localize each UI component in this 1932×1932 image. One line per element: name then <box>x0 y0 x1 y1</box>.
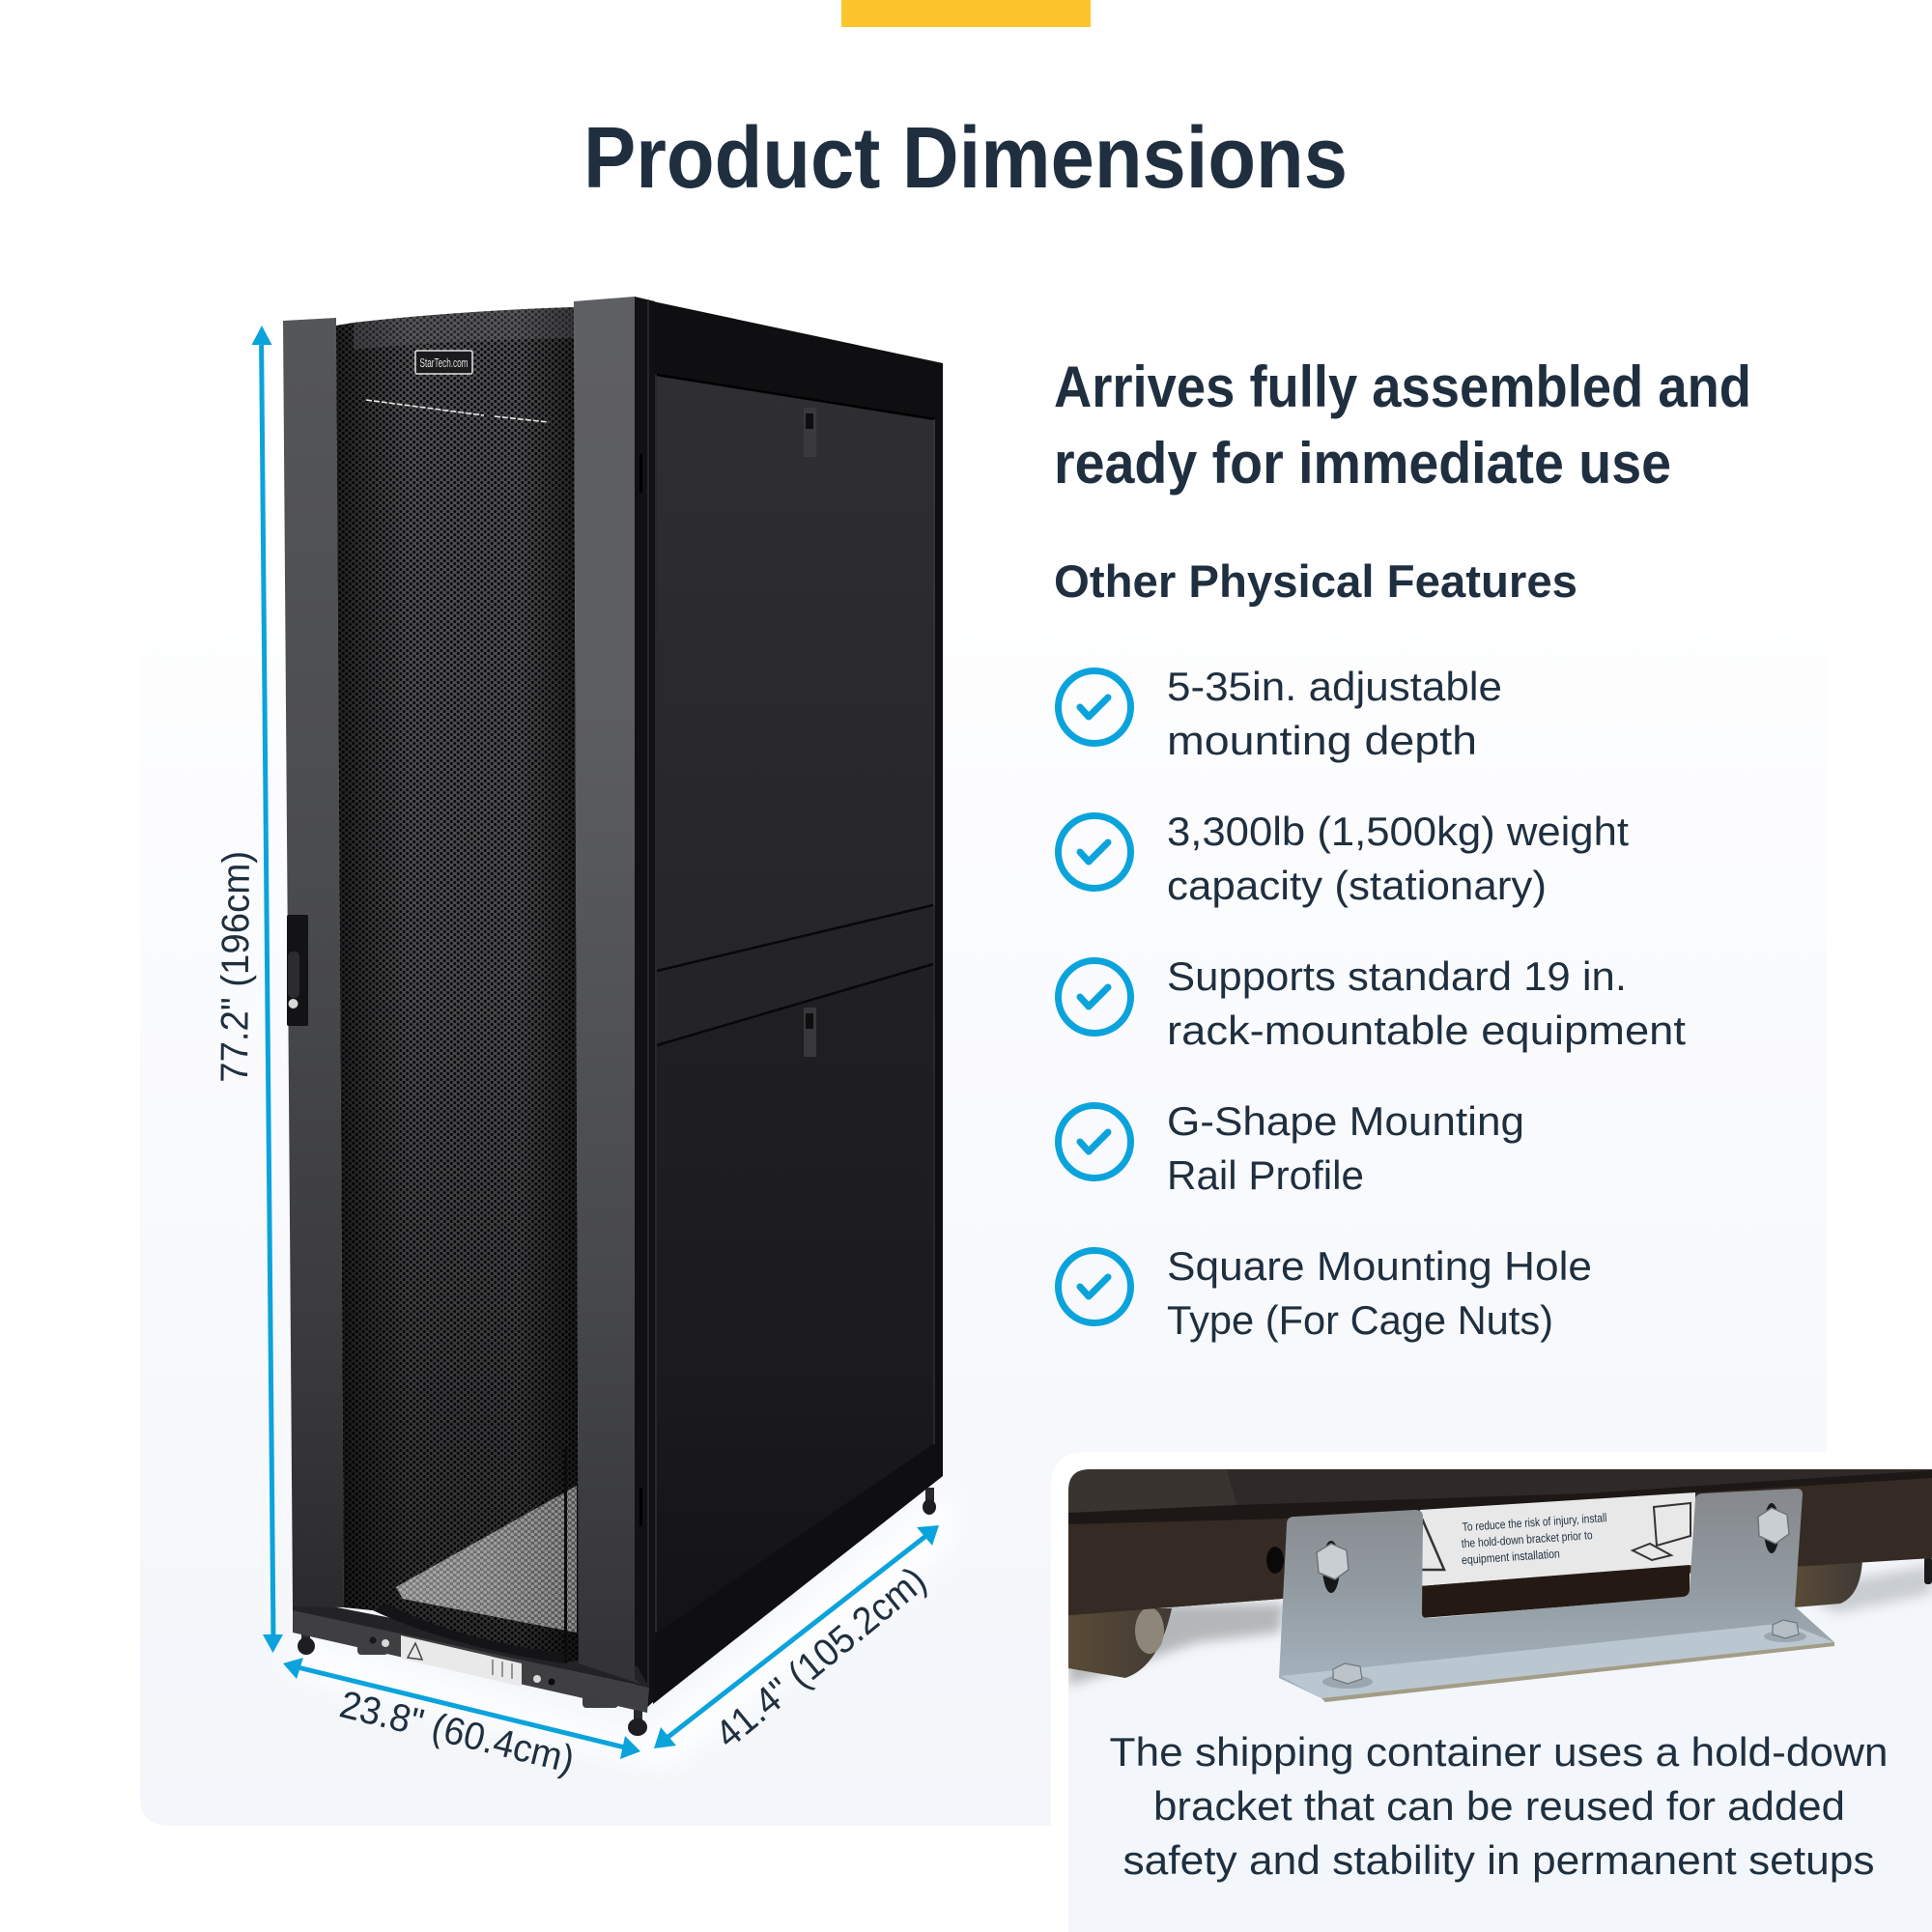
feature: mounting hole: Square Mounting Hole <box>1167 1243 1592 1289</box>
feature: weight capacity: 3,300lb (1,500kg) weight <box>1167 809 1629 854</box>
frame hole <box>1266 1547 1284 1574</box>
bracket caption: bracket that can be reused for added <box>1153 1783 1845 1829</box>
feature: weight capacity: capacity (stationary) <box>1167 863 1547 908</box>
frame <box>1068 1470 1932 1615</box>
feature: 19 in. equipment <box>1059 953 1686 1053</box>
label <box>1420 1492 1695 1586</box>
feature: rail profile: G-Shape Mounting <box>1167 1098 1524 1144</box>
feature list <box>1059 664 1686 1343</box>
label: the hold-down bracket prior to <box>1461 1528 1593 1550</box>
photo: bracket <box>1068 1469 1932 1702</box>
perforated mesh door <box>336 307 579 1663</box>
bracket caption: The shipping container uses a hold-down <box>1109 1729 1888 1775</box>
cabinet feet <box>298 1488 936 1736</box>
feature: 19 in. equipment: Supports standard 19 in. <box>1167 953 1627 999</box>
feature: mounting hole <box>1059 1243 1592 1343</box>
feature: 19 in. equipment: rack-mountable equipment <box>1167 1008 1686 1053</box>
feature: mounting depth: mounting depth <box>1167 718 1477 763</box>
door highlights <box>366 400 549 422</box>
left stile <box>283 318 344 1607</box>
heading: assembled <box>1054 355 1751 496</box>
side panels <box>653 301 943 1704</box>
bracket plate <box>1279 1489 1834 1698</box>
heading: assembled: ready for immediate use <box>1054 431 1671 496</box>
right stile <box>574 297 640 1684</box>
arrow: height <box>251 326 283 1653</box>
arrow: width <box>283 1658 640 1759</box>
feature: mounting hole: Type (For Cage Nuts) <box>1167 1297 1553 1343</box>
bracket caption: safety and stability in permanent setups <box>1122 1837 1874 1883</box>
label: To reduce the risk of injury, install <box>1462 1511 1607 1534</box>
cabinet underside <box>1068 1469 1250 1513</box>
feature: rail profile <box>1059 1098 1524 1198</box>
slot <box>1420 1565 1690 1618</box>
floor seen through mesh <box>396 1486 577 1633</box>
feature: mounting depth <box>1059 664 1502 763</box>
photo: server cabinet <box>283 297 952 1768</box>
floor shadow <box>1068 1604 1285 1686</box>
bolts <box>1317 1503 1806 1689</box>
feature: rail profile: Rail Profile <box>1167 1152 1364 1198</box>
feature: mounting depth: 5-35in. adjustable <box>1167 664 1502 709</box>
base plate <box>293 1599 649 1688</box>
heading: assembled: Arrives fully assembled and <box>1054 355 1751 419</box>
accent bar <box>841 0 1091 27</box>
bracket caption <box>1109 1729 1888 1883</box>
door handle <box>287 915 308 1026</box>
dimension label: depth: 41.4" (105.2cm) <box>707 1559 934 1756</box>
panel: background <box>140 290 1827 1826</box>
wheels <box>1068 1563 1862 1678</box>
base label <box>369 1635 554 1687</box>
panel: hold-down bracket card <box>1051 1452 1932 1932</box>
feature: weight capacity <box>1059 809 1629 908</box>
door hinge edge <box>635 297 655 1713</box>
title: Product Dimensions <box>583 110 1348 207</box>
dimension label: width: 23.8" (60.4cm) <box>335 1683 579 1781</box>
floor glow <box>290 1488 952 1768</box>
logo badge <box>415 351 472 374</box>
subheading: other physical features: Other Physical Features <box>1054 555 1577 607</box>
dimension label: height: 77.2" (196cm) <box>213 851 258 1083</box>
logo badge: StarTech.com <box>419 356 468 370</box>
arrow: depth <box>654 1525 939 1748</box>
label: equipment installation <box>1462 1547 1560 1567</box>
